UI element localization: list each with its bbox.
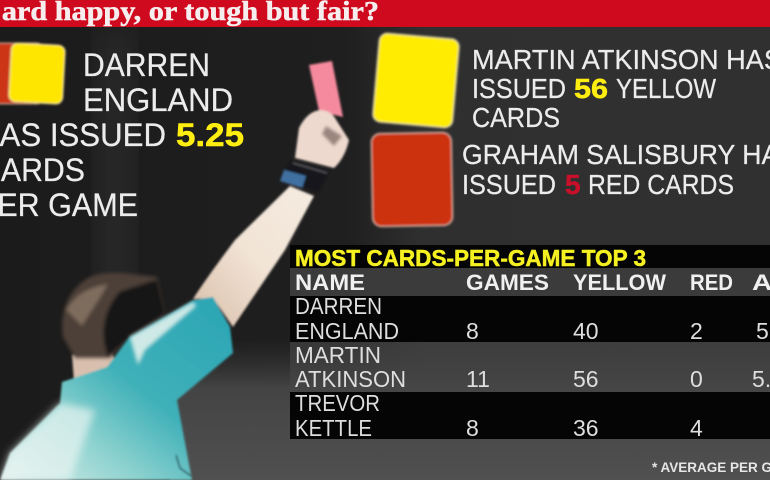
icon: red card [371,132,453,227]
header banner [0,0,770,27]
referee photo [0,61,349,480]
callout text [472,44,770,133]
table header row: GAMES [466,270,549,295]
table row: Darren England: 40 [573,318,599,344]
left callout: Darren England [0,43,244,223]
callout text: ISSUED [462,169,556,200]
red card callout: Graham Salisbury [371,132,770,227]
referee arm [193,186,314,327]
table row: Trevor Kettle [290,390,770,441]
wristwatch [280,160,329,192]
referee hand [295,110,349,168]
callout text: ENGLAND [83,82,233,118]
table row: Darren England: 8 [466,318,479,344]
table row: Martin Atkinson: 0 [690,366,703,392]
referee shirt [0,297,233,480]
table header row [295,270,770,295]
callout text [0,47,244,223]
callout text [462,139,770,200]
table row: Darren England: DARREN [295,293,382,319]
table header row: YELLOW [573,270,666,295]
callout text: DARREN [83,47,210,83]
callout text: RED CARDS [588,169,734,200]
table row: Trevor Kettle: 36 [573,415,599,441]
referee head [62,273,165,382]
callout text: 56 [574,73,608,104]
table row: Darren England [290,293,770,344]
table row: Darren England: 2 [690,318,703,344]
yellow card callout: Martin Atkinson [372,33,770,133]
callout text: YELLOW [616,73,716,104]
callout text: ISSUED [472,73,566,104]
table row: Martin Atkinson: 11 [466,366,490,392]
callout text: 5.25 [176,117,244,153]
icon: raised red card [309,61,343,117]
table row: Martin Atkinson: 56 [573,366,599,392]
table row: Martin Atkinson: ATKINSON [295,366,406,392]
table row: Trevor Kettle: TREVOR [295,390,380,416]
table row: Martin Atkinson: MARTIN [295,342,381,368]
table row: Trevor Kettle: 8 [466,415,479,441]
table header row: RED [690,270,733,295]
table row: Trevor Kettle: 4 [690,415,703,441]
table row: Darren England: ENGLAND [295,318,399,344]
table: most cards per game [290,245,770,441]
callout text: CARDS [472,102,560,133]
icon: yellow card [372,33,460,128]
table row: Trevor Kettle: KETTLE [295,415,372,441]
callout text: 5 [565,169,581,200]
table title bar: MOST CARDS-PER-GAME TOP 3 [295,245,646,271]
icon: red and yellow cards [0,43,65,104]
table row: Martin Atkinson [290,342,770,392]
table header row: NAME [295,270,365,295]
